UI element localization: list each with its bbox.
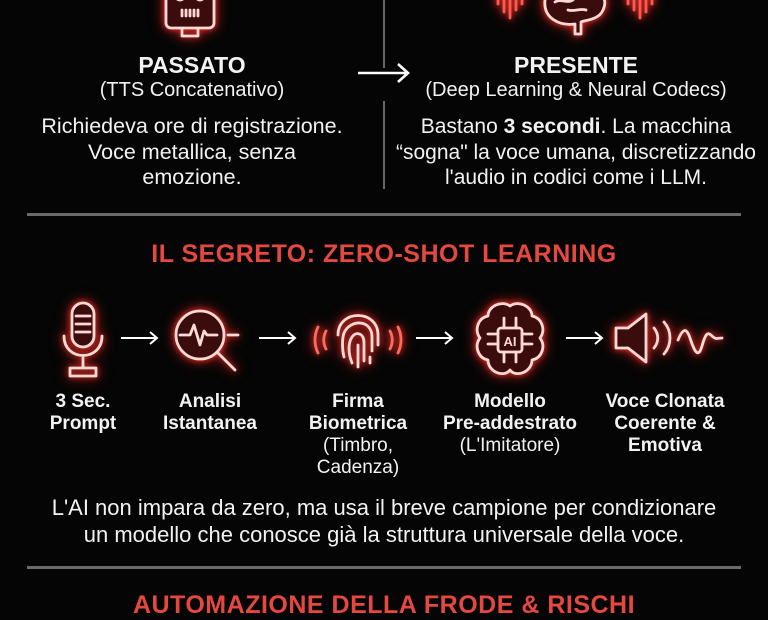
text: passato body <box>41 114 343 189</box>
icon: microphone <box>54 292 112 388</box>
heading: passato: PASSATO <box>138 52 246 78</box>
label: firma: (Timbro, <box>323 435 393 456</box>
arrow 4 <box>566 331 604 345</box>
labels: steps <box>50 391 725 478</box>
label: firma: Cadenza) <box>317 457 399 478</box>
label: analisi: Istantanea <box>163 413 257 434</box>
label: 3 sec prompt: 3 Sec. <box>56 391 110 412</box>
label: firma <box>309 391 408 478</box>
icon: speaker with wave <box>604 306 729 370</box>
label: voce clonata: Coerente & <box>614 413 716 434</box>
icon: AI brain <box>466 292 554 384</box>
subtitle: passato: (TTS Concatenativo) <box>100 79 284 101</box>
text: passato body: emozione. <box>142 165 242 189</box>
arrow 2 <box>259 331 296 345</box>
icon: robot <box>154 0 226 47</box>
heading: zero-shot learning: IL SEGRETO: ZERO-SHOT LEARNING <box>151 240 617 268</box>
heading: automazione della frode: AUTOMAZIONE DELLA FRODE & RISCHI <box>133 591 635 619</box>
arrow: passato to presente <box>358 63 410 83</box>
heading: presente: PRESENTE <box>514 52 638 78</box>
icon: magnifier with pulse <box>164 300 245 377</box>
label: voce clonata: Emotiva <box>628 435 702 456</box>
text: explanation: L'AI non impara da zero, ma usa il breve campione per condizionare <box>52 495 716 520</box>
text: presente body: l'audio in codici come i LLM. <box>445 166 707 189</box>
icon: fingerprint <box>304 305 412 374</box>
panel: presente <box>396 52 756 189</box>
text: explanation: un modello che conosce già la struttura universale della voce. <box>84 522 684 547</box>
icon: AI brain: AI <box>504 334 516 349</box>
text: passato body: Voce metallica, senza <box>88 140 296 164</box>
label: modello: (L'Imitatore) <box>460 435 560 456</box>
label: analisi: Analisi <box>179 391 241 412</box>
text: presente body: “sogna" la voce umana, discretizzando <box>396 140 756 164</box>
label: voce clonata <box>606 391 725 456</box>
arrow 3 <box>416 331 454 345</box>
subtitle: presente: (Deep Learning & Neural Codecs) <box>425 79 727 101</box>
label: voce clonata: Voce Clonata <box>606 391 724 412</box>
label: modello <box>443 391 577 456</box>
arrow 1 <box>121 331 158 345</box>
label: 3 sec prompt <box>50 391 116 434</box>
icon: brain with waveforms <box>488 0 662 44</box>
divider: vertical <box>383 0 385 68</box>
text: presente body <box>396 115 756 189</box>
label: modello: Modello <box>474 391 546 412</box>
label: firma: Firma <box>332 391 384 412</box>
label: analisi <box>163 391 258 434</box>
text: passato body: Richiedeva ore di registrazione. <box>41 114 343 138</box>
text: explanation <box>52 495 716 547</box>
label: modello: Pre-addestrato <box>443 413 577 434</box>
label: firma: Biometrica <box>309 413 407 434</box>
panel: passato <box>41 52 343 189</box>
label: 3 sec prompt: Prompt <box>50 413 116 434</box>
text: presente body: Bastano 3 secondi. La macchina <box>421 115 731 138</box>
